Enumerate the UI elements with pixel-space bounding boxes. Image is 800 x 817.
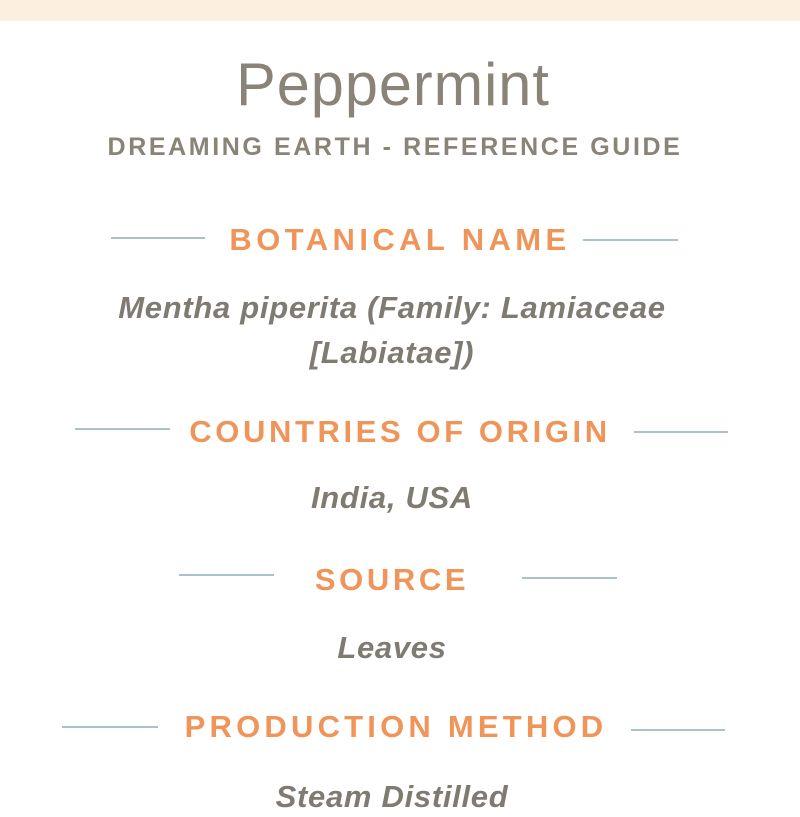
top band <box>0 0 800 21</box>
heading: botanical name: BOTANICAL NAME <box>229 222 571 257</box>
text: botanical name: Mentha piperita (Family: Lamiaceae <box>118 290 666 325</box>
section: countries of origin <box>75 414 728 515</box>
text: production: Steam Distilled <box>276 779 508 814</box>
heading: source: SOURCE <box>315 562 469 597</box>
subtitle: DREAMING EARTH - REFERENCE GUIDE <box>108 133 682 161</box>
text: countries: India, USA <box>311 480 473 515</box>
section: source <box>179 562 617 665</box>
section: botanical name: [Labiatae]) <box>310 335 474 370</box>
text: source: Leaves <box>337 630 447 665</box>
heading: production: PRODUCTION METHOD <box>185 709 607 744</box>
heading: countries: COUNTRIES OF ORIGIN <box>189 414 611 449</box>
section: production method <box>62 709 725 814</box>
title: Peppermint <box>236 51 550 118</box>
section: botanical name <box>111 222 678 370</box>
